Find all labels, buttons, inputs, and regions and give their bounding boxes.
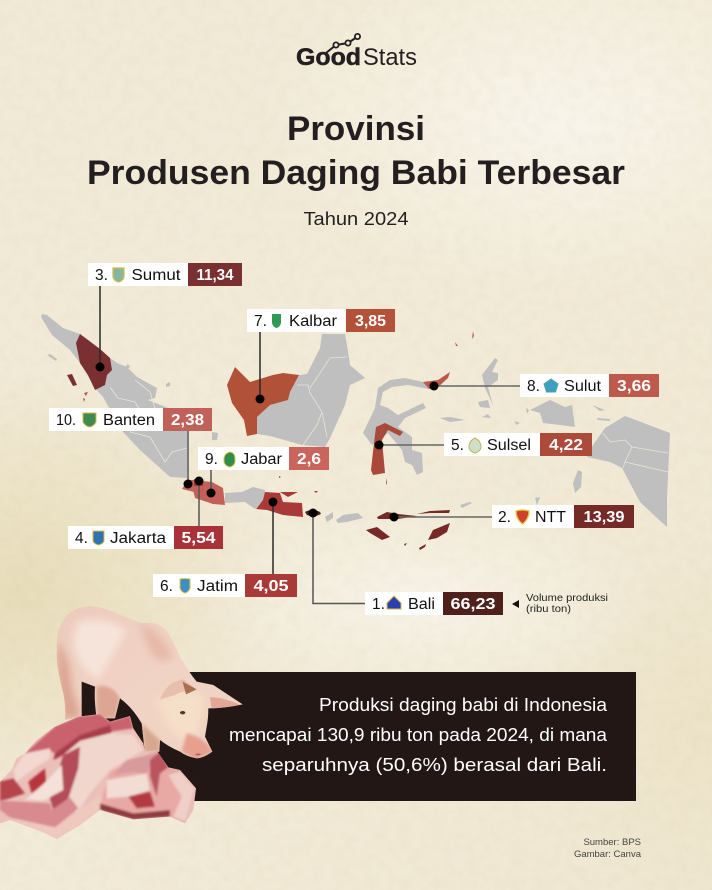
region: Kalbar [227,367,299,436]
label: NTT: 13,39 [584,509,625,526]
label: Sumut: 3. [95,267,108,284]
label: Jakarta [68,526,223,549]
region: NTT [377,510,450,519]
title: Provinsi [287,110,425,148]
label: Sulsel: 4,22 [549,437,583,454]
pig ear, left [160,679,197,699]
legend note: volume produksi: (ribu ton) [526,604,571,615]
legend note: volume produksi: Volume produksi [526,593,608,604]
label: Sumut: Sumut [132,267,181,284]
label: Sumut [88,263,242,286]
label: Bali: 1. [372,596,385,613]
connector lines [100,286,520,604]
label: Banten: 10. [56,412,76,429]
pig snout nostril [195,753,201,755]
label: Bali: 66,23 [450,596,496,613]
source credits: Sumber: BPS [583,837,641,848]
region: Sumatra [41,314,187,478]
location dots [96,362,438,522]
label: Kalbar: Kalbar [289,313,337,330]
legend note: volume produksi [512,593,608,615]
label: Jakarta: 4. [75,530,88,547]
region: Lombok and Sumbawa [325,512,363,523]
callout panel: separuhnya (50,6%) berasal dari Bali. [262,755,607,775]
region: Sulut [423,372,450,389]
label: Sumut: 11,34 [196,267,234,284]
logo: GoodStats: Stats [363,44,417,71]
logo: GoodStats [296,34,417,71]
label: Banten: 2,38 [171,412,204,429]
label: Bali: Bali [408,596,435,613]
region: Jatim [256,492,303,517]
logo: GoodStats: Good [296,44,361,71]
label: Sulut [520,374,659,397]
label: Jabar [198,447,329,470]
pig eye [180,711,185,714]
label: Jakarta: Jakarta [110,530,166,547]
region: Sulawesi [363,378,429,475]
label: Kalbar: 7. [254,313,267,330]
region: Maluku [440,358,610,505]
label: Jakarta: 5,54 [182,530,216,547]
callout panel [79,672,636,801]
region: Jakarta [194,479,203,486]
label: Sulut: 8. [527,378,540,395]
label: Kalbar: 3,85 [355,313,386,330]
region: Sulsel [371,423,403,485]
title: Produsen Daging Babi Terbesar [87,154,625,192]
callout panel: Produksi daging babi di Indonesia [319,695,608,715]
region: Sumut [76,334,112,390]
label: Sulut: 3,66 [617,378,651,395]
map of Indonesia [41,314,670,550]
region: Central Java [225,487,265,509]
label: Sulsel: 5. [451,437,464,454]
label: NTT: NTT [535,509,567,526]
subtitle: Tahun 2024 [304,209,408,229]
label: Jatim: Jatim [197,578,238,595]
source credits [574,837,642,860]
callout panel: mencapai 130,9 ribu ton pada 2024, di mana [229,725,608,745]
region: Jabar [193,480,225,505]
label: Sulsel: Sulsel [487,437,531,454]
label: Banten [49,408,212,431]
label: Jabar: 2,6 [297,451,321,468]
label: Sulut: Sulut [564,378,602,395]
illustration: pork meat [0,710,200,843]
label: Jatim: 4,05 [254,578,289,595]
region: Kalimantan [257,334,365,447]
region: Bali [305,510,321,516]
region: Banten [182,480,194,492]
label: Banten: Banten [103,412,155,429]
label: Jatim [153,574,297,597]
label: Jabar: 9. [205,451,218,468]
source credits: Gambar: Canva [574,849,642,860]
label: Jatim: 6. [160,578,173,595]
label: Kalbar [247,309,395,332]
label: NTT [492,505,634,528]
label: Bali [365,592,503,615]
illustration: pig [56,606,242,758]
label: Jabar: Jabar [241,451,282,468]
label: Sulsel [444,433,592,456]
label: NTT: 2. [498,509,511,526]
title [87,110,625,192]
pig ear, right [210,697,240,708]
region: Papua [587,416,670,527]
